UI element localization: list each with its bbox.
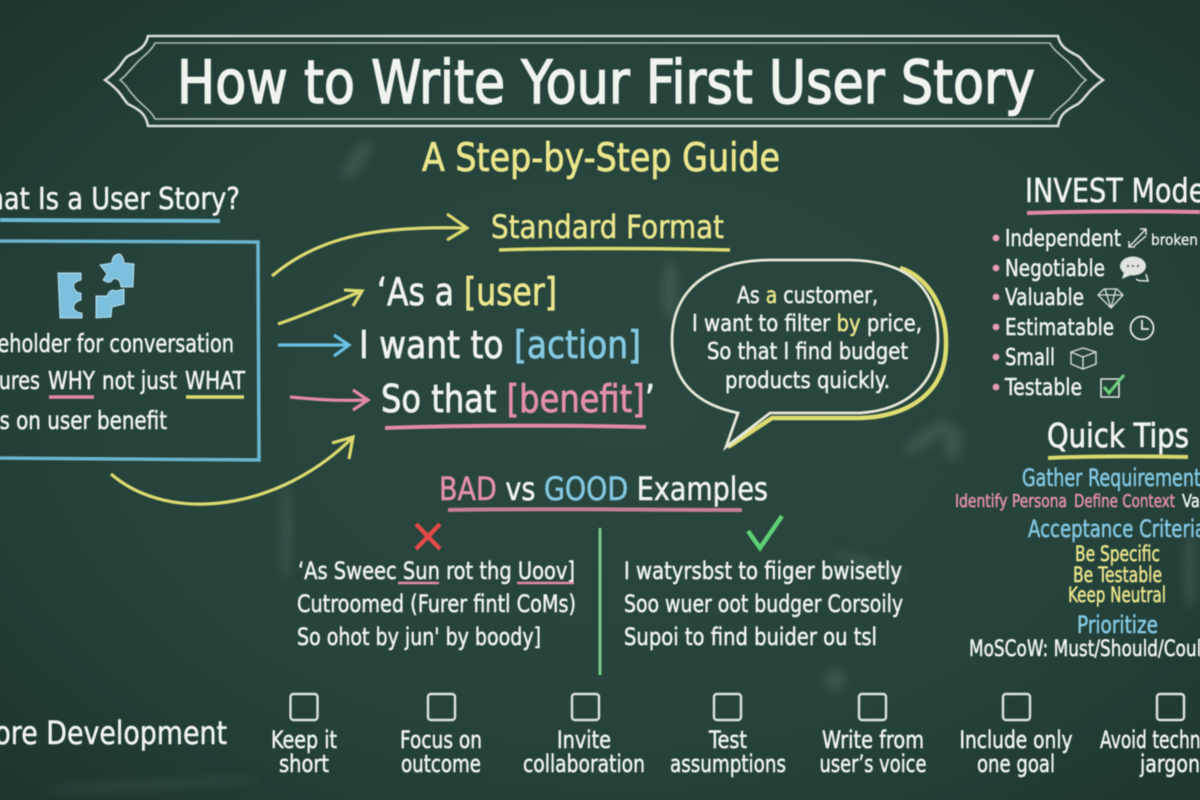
- section: prioritize: Prioritize: [1077, 611, 1158, 639]
- checklist item 1: [271, 694, 337, 778]
- list: INVEST items: Negotiable: [1005, 254, 1105, 282]
- callout: example story speech bubble: [672, 260, 946, 447]
- panel: INVEST model: [993, 171, 1200, 401]
- icon: box: [1071, 348, 1096, 369]
- list: INVEST items: [993, 224, 1121, 401]
- checklist item 6: [960, 694, 1072, 778]
- arrow: to action line: [278, 335, 349, 356]
- callout: example story speech bubble: As a customer,: [737, 283, 878, 309]
- checklist item 4: assumptions: [670, 750, 786, 778]
- checklist item 3: Invite: [557, 726, 611, 754]
- subtitle: A Step-by-Step Guide: [422, 136, 780, 181]
- text: good example: [624, 557, 903, 651]
- callout: example story speech bubble: So that I find budget: [707, 339, 908, 365]
- checklist item 5: Write from: [822, 726, 924, 754]
- icon: diamond: [1098, 289, 1123, 308]
- callout: example story speech bubble: I want to filter by price,: [692, 311, 922, 337]
- checklist item 4: [670, 694, 786, 778]
- list: INVEST items: Small: [1005, 343, 1055, 371]
- arrow: to benefit line: [290, 390, 368, 410]
- section: acceptance criteria: Be Testable: [1073, 563, 1162, 587]
- text: bad example: Cutroomed (Furer fintl CoMs): [297, 590, 576, 618]
- text: bad example: [297, 557, 576, 651]
- checklist item 2: outcome: [401, 750, 481, 778]
- checklist item 2: [400, 694, 482, 778]
- icon: speech bubbles: [1120, 256, 1148, 281]
- text: good example: I watyrsbst to fiiger bwisetly: [624, 557, 902, 585]
- checklist item 2: Focus on: [400, 726, 482, 754]
- divider: [598, 528, 602, 675]
- arrow: to user line: [278, 290, 362, 324]
- heading: bad vs good: BAD vs GOOD Examples: [439, 470, 768, 508]
- panel: what is a user story: WHAT: [185, 366, 246, 395]
- list: INVEST items: Independent: [1005, 224, 1121, 252]
- panel: what is a user story: [0, 182, 259, 460]
- checklist item 3: [523, 694, 645, 778]
- section: gather requirements: Identify Persona: [955, 491, 1067, 512]
- list: INVEST items: Estimatable: [1005, 313, 1114, 341]
- icon: broken arrows: [1129, 229, 1198, 249]
- title: [105, 36, 1103, 126]
- section: acceptance criteria: Be Specific: [1075, 542, 1160, 566]
- heading: standard format: Standard Format: [491, 208, 724, 246]
- text: good example: Supoi to find buider ou tsl: [624, 623, 877, 651]
- panel: what is a user story: WHY: [48, 366, 96, 395]
- checklist item 7: [1100, 694, 1200, 778]
- checklist item 1: short: [279, 750, 329, 778]
- text: bad example: So ohot by jun' by boody]: [297, 623, 541, 651]
- checklist item 6: Include only: [960, 726, 1072, 754]
- panel: what is a user story: not just: [102, 366, 177, 395]
- callout: example story speech bubble: products quickly.: [725, 368, 890, 394]
- checklist item 5: user’s voice: [820, 750, 926, 778]
- icon: clock: [1130, 316, 1154, 340]
- panel: bad vs good examples: [297, 470, 903, 675]
- checklist item 3: collaboration: [523, 750, 645, 778]
- list: INVEST items: Valuable: [1005, 283, 1084, 311]
- section: prioritize: [969, 611, 1200, 662]
- format line 3: So that [benefit]’: [381, 377, 655, 421]
- checklist item 1: Keep it: [271, 726, 337, 754]
- icon: green check: [748, 516, 782, 548]
- panel: quick tips: [955, 416, 1200, 662]
- icon: red cross: [416, 524, 440, 549]
- checklist item 5: [820, 694, 926, 778]
- format line 1: ‘As a [user]: [377, 270, 557, 314]
- panel: standard format: [359, 208, 730, 428]
- icon: checkbox: [1101, 375, 1124, 397]
- checklist item 4: Test: [708, 726, 747, 754]
- title: How to Write Your First User Story: [177, 48, 1035, 118]
- list: INVEST items: Testable: [1004, 373, 1082, 401]
- section: acceptance criteria: [1028, 515, 1200, 607]
- arrow: bottom curve: [111, 437, 353, 504]
- arrow: top curve to standard format: [272, 214, 467, 276]
- section: gather requirements: [955, 464, 1200, 512]
- checklist item 6: one goal: [977, 750, 1055, 778]
- icon: puzzle pieces: [58, 254, 134, 318]
- format line 2: I want to [action]: [359, 323, 641, 367]
- text: bad example: ‘As Sweec Sun rot thg Uoov]: [298, 557, 575, 585]
- text: good example: Soo wuer oot budger Corsoily: [624, 590, 903, 618]
- panel: checklist before development: [0, 694, 1200, 778]
